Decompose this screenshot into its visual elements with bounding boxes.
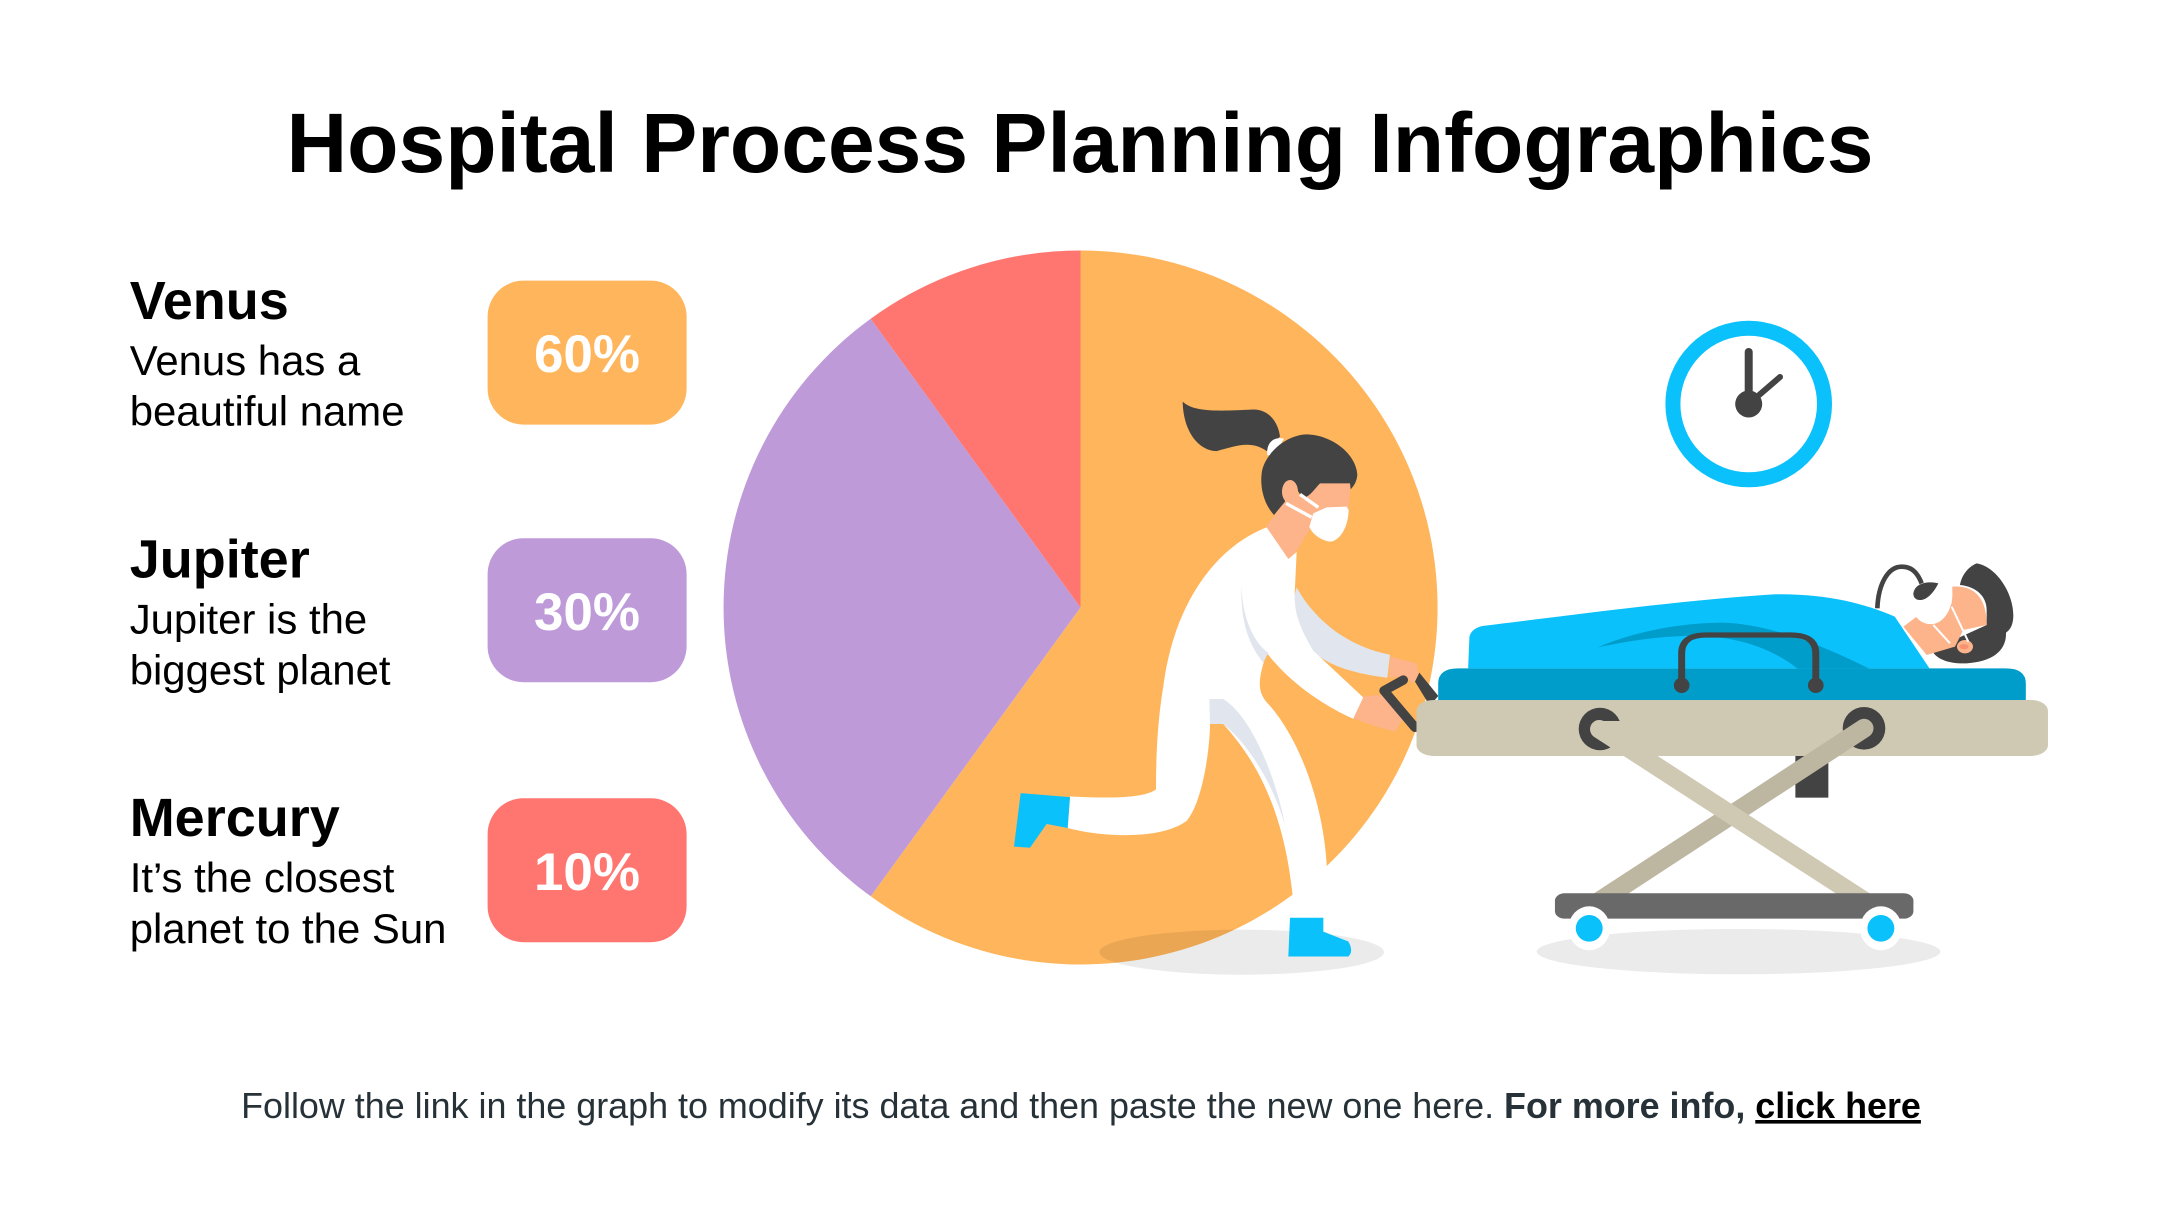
pie chart — [724, 250, 1438, 965]
text: Venus description: beautiful name — [130, 388, 405, 434]
badge: 30%: 30% — [534, 583, 640, 642]
heading: Mercury: Mercury — [130, 788, 340, 848]
icon: clock — [1673, 328, 1824, 480]
legend row: Mercury — [130, 788, 687, 952]
text: Jupiter description: biggest planet — [130, 647, 391, 694]
title: Hospital Process Planning Infographics — [287, 96, 1873, 190]
badge: 30% — [488, 538, 687, 682]
text: Mercury description: It’s the closest — [130, 854, 395, 901]
stretcher hooks and crossed legs — [1579, 707, 1885, 905]
legend row: Venus — [130, 271, 687, 434]
illustration: nurse pushing stretcher — [1014, 402, 1438, 975]
badge: 10% — [488, 798, 687, 942]
text: Mercury description: planet to the Sun — [130, 905, 446, 952]
text: Venus description: Venus has a — [130, 337, 361, 384]
footer note: Follow the link in the graph to modify its data and then paste the new one here. For more info, click here — [241, 1086, 1921, 1126]
nurse body — [1014, 527, 1363, 957]
heading: Jupiter: Jupiter — [130, 530, 310, 590]
slice: Jupiter 30% — [724, 319, 1080, 896]
patient head with oxygen mask — [1877, 563, 2013, 663]
legend row: Jupiter — [130, 530, 687, 694]
slice: Mercury 10% — [871, 250, 1080, 608]
badge: 60%: 60% — [534, 325, 640, 384]
slice: Venus 60% — [871, 250, 1438, 965]
nurse head with mask — [1261, 434, 1357, 559]
badge: 60% — [488, 281, 687, 425]
nurse hands on handle — [1353, 657, 1438, 732]
text: Jupiter description: Jupiter is the — [130, 596, 367, 643]
badge: 10%: 10% — [534, 843, 640, 902]
heading: Venus: Venus — [130, 271, 289, 331]
illustration: stretcher with patient — [1416, 563, 2048, 974]
